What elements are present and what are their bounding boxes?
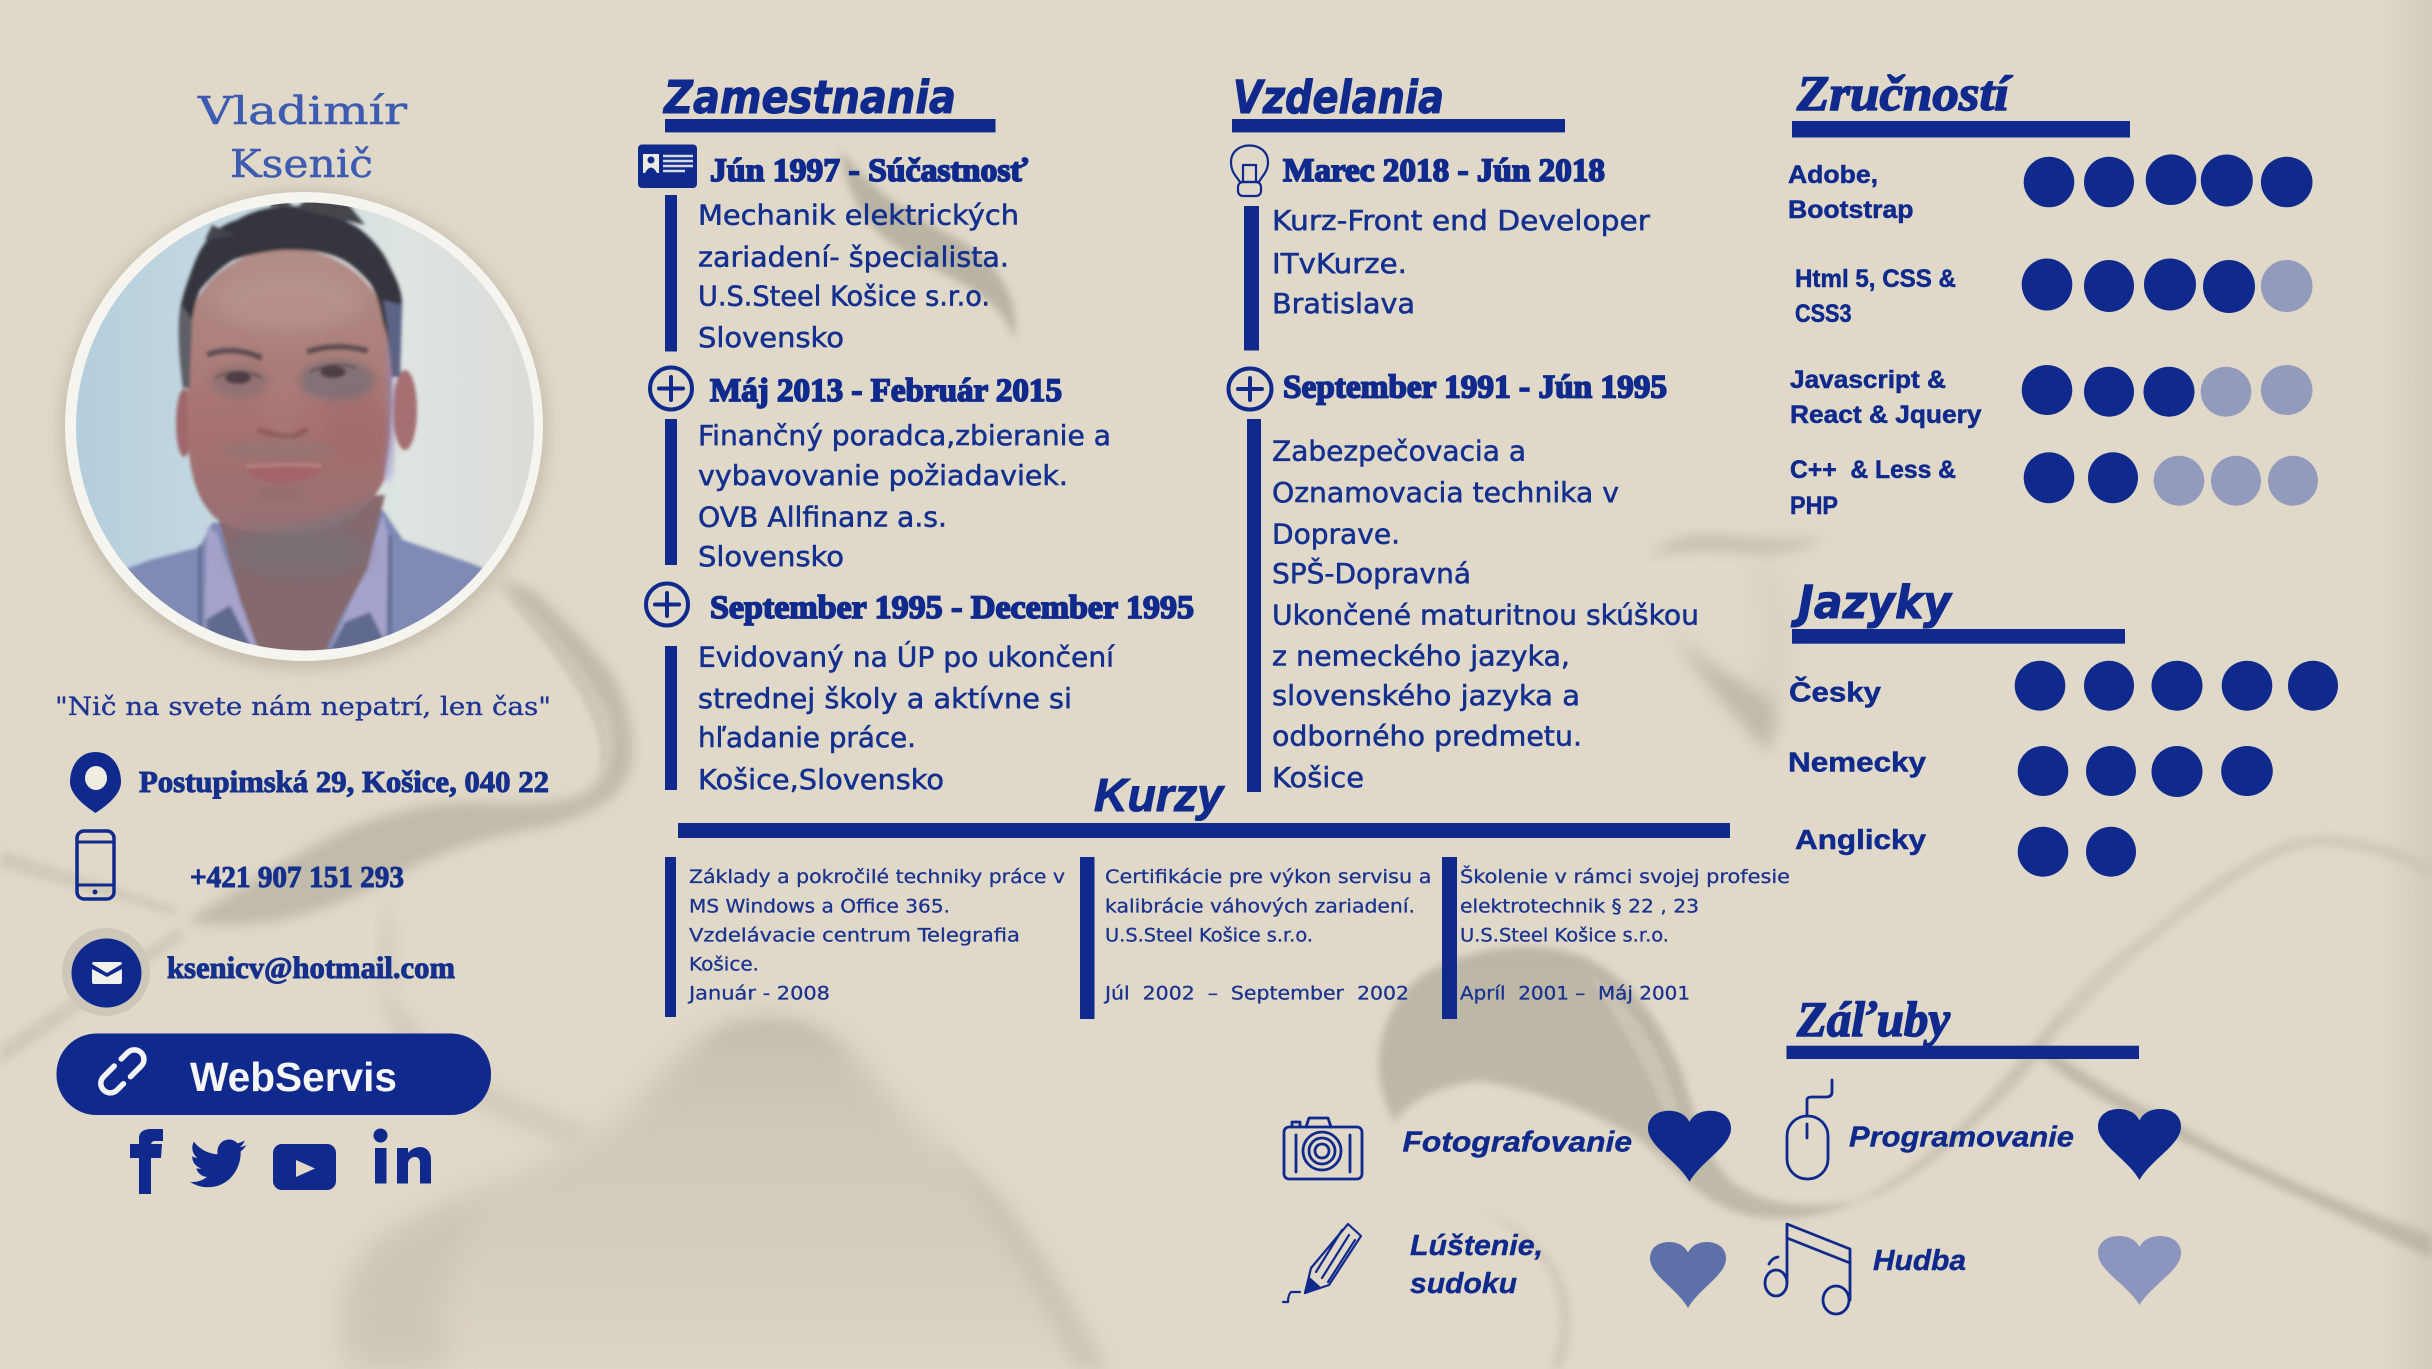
folds beside the languages: [1650, 534, 1825, 556]
hobby: puzzles: [1283, 1224, 1726, 1308]
panel: Zručností: [1788, 65, 2318, 520]
hobby: photography: [1284, 1111, 1731, 1182]
neck: [215, 495, 385, 660]
entry: 1991: Zabezpečovacia a: [1272, 434, 1526, 468]
icon: linkedin: [374, 1128, 431, 1184]
hobby: music: Hudba: [1873, 1245, 1966, 1277]
icon: heart: [1650, 1242, 1726, 1308]
dome with swoosh: [1379, 947, 1860, 1218]
panel: Zamestnania: [638, 71, 1194, 796]
wave from the portrait down to the contact block: [186, 578, 632, 925]
heading: Zamestnania: [662, 71, 956, 124]
entry: 2018: Kurz-Front end Developer: [1272, 204, 1651, 237]
entry: 2013: vybavovanie požiadaviek.: [698, 459, 1068, 492]
course 1: [665, 857, 1065, 1017]
icon: computer mouse: [1787, 1080, 1832, 1179]
left column: profile: [55, 89, 551, 1194]
skill: Adobe, Bootstrap: Adobe,: [1788, 161, 1878, 189]
skill: C++, Less, PHP: PHP: [1790, 492, 1838, 520]
icon: heart: [2098, 1109, 2181, 1180]
phone number: +421 907 151 293: [190, 859, 404, 894]
moustache shadow: [228, 440, 328, 458]
icon: light bulb: [1231, 146, 1268, 196]
panel: Jazyky: [1788, 576, 2338, 877]
course 2: Certifikácie pre výkon servisu a: [1105, 866, 1432, 888]
hobby: programming: Programovanie: [1849, 1122, 2074, 1154]
entry: 1991: Oznamovacia technika v: [1272, 476, 1619, 509]
icon: id card: [638, 144, 697, 188]
entry: 1997: zariadení- špecialista.: [698, 240, 1009, 274]
language: Nemecky: Nemecky: [1788, 746, 1926, 778]
entry: 2018: Bratislava: [1272, 287, 1415, 320]
course 1: Vzdelávacie centrum Telegrafia: [689, 924, 1020, 946]
quote: "Nič na svete nám nepatrí, len čas": [55, 692, 551, 721]
entry: 2013: Máj 2013 - Február 2015: [710, 373, 1062, 409]
language: Anglicky: [1795, 824, 2136, 877]
entry: 2018: ITvKurze.: [1272, 247, 1407, 280]
shirt: [204, 527, 258, 646]
entry: 2013: [650, 368, 1111, 573]
language: Česky: Česky: [1789, 676, 1881, 708]
entry: 1991: odborného predmetu.: [1272, 720, 1582, 752]
skill: C++, Less, PHP: C++ & Less &: [1790, 456, 1956, 484]
entry: 1991: [1228, 368, 1699, 794]
icon: plus: [1228, 368, 1272, 410]
icon: facebook: [130, 1129, 163, 1194]
hobby: puzzles: sudoku: [1410, 1268, 1517, 1300]
entry: 2018: [1231, 146, 1651, 350]
course 3: [1442, 857, 1790, 1019]
entry: 1997: U.S.Steel Košice s.r.o.: [698, 280, 990, 312]
entry: 1995: strednej školy a aktívne si: [698, 682, 1072, 715]
ears: [176, 389, 192, 457]
entry: 1991: Ukončené maturitnou skúškou: [1272, 598, 1699, 632]
course 2: kalibrácie váhových zariadení.: [1105, 896, 1415, 918]
brows: [207, 351, 262, 358]
entry: 1995: Evidovaný na ÚP po ukončení: [698, 640, 1115, 674]
skill: Adobe, Bootstrap: Bootstrap: [1788, 196, 1914, 224]
icon: camera: [1284, 1118, 1362, 1179]
course 2: U.S.Steel Košice s.r.o.: [1105, 924, 1313, 946]
icon: location pin: [70, 752, 121, 813]
icon: email: [62, 928, 150, 1016]
entry: 2018: Marec 2018 - Jún 2018: [1283, 153, 1605, 189]
entry: 1995: [646, 584, 1194, 796]
panel: Kurzy: [665, 769, 1790, 1019]
icon: phone: [77, 831, 114, 899]
heading: [1786, 991, 2139, 1059]
heading: Jazyky: [1790, 576, 1953, 629]
mountain shape at the bottom: [342, 1018, 1109, 1369]
entry: 1991: Košice: [1272, 761, 1364, 794]
hobby: programming: [1787, 1080, 2181, 1180]
course 3: Školenie v rámci svojej profesie: [1460, 864, 1790, 888]
hair: [176, 203, 404, 352]
entry: 1997: Slovensko: [698, 321, 844, 354]
heading: [678, 769, 1730, 838]
entry: 1995: hľadanie práce.: [698, 721, 916, 754]
face: [187, 248, 392, 534]
icon: heart: [1648, 1111, 1731, 1182]
course 1: MS Windows a Office 365.: [689, 896, 950, 918]
entry: 2013: Finančný poradca,zbieranie a: [698, 419, 1111, 452]
language: Nemecky: [1788, 746, 2273, 797]
button: WebServis: WebServis: [190, 1054, 397, 1100]
icon: twitter: [190, 1140, 246, 1187]
entry: 1991: slovenského jazyka a: [1272, 679, 1580, 712]
heading: Vzdelania: [1233, 71, 1444, 124]
entry: 1991: SPŠ-Dopravná: [1272, 556, 1471, 590]
entry: 1995: September 1995 - December 1995: [710, 590, 1194, 626]
small fold at the top: [841, 150, 1016, 340]
entry: 1991: Doprave.: [1272, 518, 1400, 550]
entry: 2013: OVB Allfinanz a.s.: [698, 500, 947, 534]
social icons: [130, 1128, 431, 1194]
panel: Vzdelania: [1228, 71, 1699, 794]
address: Postupimská 29, Košice, 040 22: [139, 764, 549, 799]
mouth: [246, 467, 321, 483]
course 1: Január - 2008: [688, 982, 830, 1004]
heading: Kurzy: [1094, 769, 1225, 821]
name: Vladimír: [197, 89, 408, 133]
name: Ksenič: [230, 142, 373, 186]
course 2: Júl 2002 – September 2002: [1104, 982, 1409, 1004]
icon: heart: [2098, 1236, 2181, 1305]
course 3: U.S.Steel Košice s.r.o.: [1460, 924, 1669, 946]
icon: music notes: [1765, 1224, 1850, 1314]
language: Česky: [1789, 661, 2338, 711]
course 1: Košice.: [689, 954, 759, 976]
skill: Html 5, CSS & CSS3: [1795, 258, 2312, 328]
heading: Záľuby: [1796, 991, 1951, 1047]
heading: [1792, 65, 2130, 138]
entry: 1991: September 1991 - Jún 1995: [1283, 370, 1667, 406]
curve along the light blob: [380, 985, 590, 1150]
jacket: [127, 508, 484, 650]
skill: C++, Less, PHP: [1790, 452, 2318, 520]
email address: ksenicv@hotmail.com: [167, 950, 455, 985]
skill: Adobe, Bootstrap: [1788, 154, 2312, 224]
entry: 1997: Jún 1997 - Súčastnosť: [710, 153, 1028, 189]
skill: Javascript, React, Jquery: [1790, 365, 2312, 429]
entry: 1997: [638, 144, 1028, 354]
button: WebServis: [56, 1034, 491, 1115]
entry: 1997: Mechanik elektrických: [698, 198, 1019, 232]
hobby: puzzles: Lúštenie,: [1410, 1230, 1543, 1262]
panel: Záľuby: [1283, 991, 2181, 1314]
heading: [1790, 576, 2125, 644]
course 2: [1080, 857, 1432, 1019]
eye sockets: [210, 365, 270, 399]
icon: youtube: [273, 1144, 336, 1190]
eyes: [225, 372, 251, 384]
nose: [265, 350, 301, 440]
hobby: photography: Fotografovanie: [1402, 1126, 1632, 1158]
entry: 2013: Slovensko: [698, 540, 844, 573]
skill: Javascript, React, Jquery: React & Jquery: [1790, 401, 1982, 429]
entry: 1991: z nemeckého jazyka,: [1272, 640, 1570, 672]
heading: Zručností: [1796, 65, 2013, 121]
icon: plus: [646, 584, 688, 626]
icon: pencil: [1283, 1224, 1361, 1302]
skill: Html 5, CSS & CSS3: Html 5, CSS &: [1795, 265, 1956, 293]
course 3: elektrotechnik § 22 , 23: [1460, 896, 1699, 918]
heading: [1232, 71, 1565, 132]
hobby: music: [1765, 1224, 2181, 1314]
skill: Javascript, React, Jquery: Javascript &: [1790, 366, 1946, 394]
icon: plus: [650, 368, 692, 410]
entry: 1995: Košice,Slovensko: [698, 763, 944, 796]
skill: Html 5, CSS & CSS3: CSS3: [1795, 300, 1852, 328]
language: Anglicky: Anglicky: [1795, 824, 1926, 855]
photo: portrait in round frame: [61, 191, 547, 670]
course 1: Základy a pokročilé techniky práce v: [689, 866, 1065, 888]
name: [197, 89, 408, 186]
course 3: Apríl 2001 – Máj 2001: [1460, 982, 1690, 1004]
